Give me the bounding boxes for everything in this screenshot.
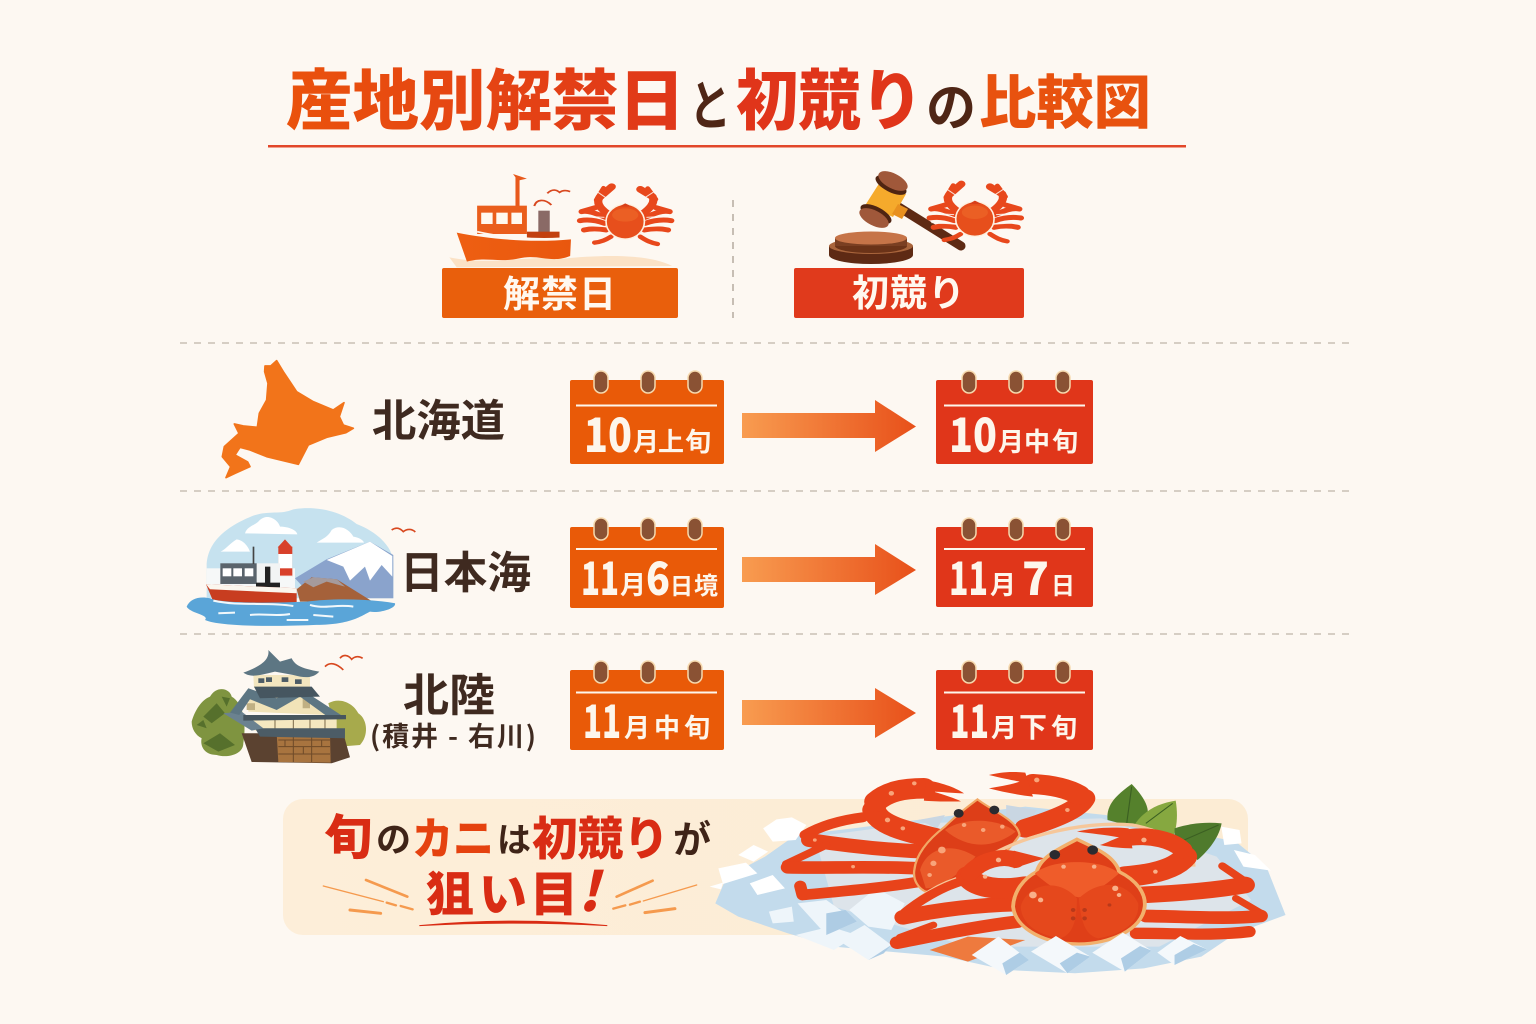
callout text line 1: は [497, 813, 531, 862]
callout text line 1: カニ [412, 803, 494, 867]
icon: crab [580, 187, 671, 244]
calendar: 11月7日: 11 [949, 543, 988, 608]
calendar: 10月上旬 [570, 371, 724, 466]
row: 日本海 [187, 508, 1093, 626]
calendar: 11月中旬: 月 [624, 708, 650, 745]
callout text line 1: 旬 [324, 798, 372, 868]
calendar: 11月7日: 7 [1022, 543, 1049, 608]
calendar: 10月中旬: 月 [998, 422, 1024, 459]
calendar: 11月6日頃: 日 [670, 567, 693, 601]
callout text line 1: 初競り [532, 803, 669, 869]
calendar: 11月下旬: 11 [950, 686, 989, 751]
label: 北海道: 北海道 [372, 385, 505, 449]
back crab [786, 772, 1085, 895]
calendar: 11月6日頃: 6 [646, 543, 670, 608]
icon: sea, boat, lighthouse, mountain [187, 508, 415, 626]
calendar: 11月下旬: 月 [991, 708, 1017, 745]
calendar: 11月下旬: 旬 [1051, 708, 1077, 745]
calendar: 10月中旬: 中 [1024, 422, 1050, 459]
label: 初競り [794, 263, 1024, 318]
calendar: 10月上旬: 月 [633, 422, 659, 459]
calendar: 10月中旬: 10 [949, 400, 997, 466]
callout text line 2: い [479, 855, 527, 925]
title: と [689, 62, 731, 141]
calendar: 11月7日: 月 [990, 565, 1016, 602]
calendar: 10月上旬: 上 [658, 422, 684, 459]
icon: fishing boat [449, 174, 672, 267]
arrow [742, 688, 916, 738]
callout text line 2: ! [578, 848, 604, 927]
callout text line 2 [426, 848, 604, 927]
title: の [926, 66, 976, 141]
label: 解禁日: 解禁日 [503, 264, 617, 318]
icon: crab [930, 184, 1021, 241]
arrow [742, 400, 916, 452]
label: 初競り: 初競り [852, 263, 966, 317]
callout text line 2: 狙 [426, 855, 474, 925]
calendar: 10月上旬: 旬 [685, 422, 711, 459]
row dividers [180, 343, 1350, 634]
label: 日本海: 日本海 [400, 537, 531, 601]
title [286, 48, 1151, 144]
title: 初競り [736, 48, 923, 144]
leaves [1107, 784, 1222, 860]
row: 北陸 [192, 650, 1093, 763]
icon: Hokkaido map [222, 361, 353, 478]
calendar: 11月6日頃 [570, 518, 724, 608]
label: 積井・右川: (積井 - 右川) [370, 715, 536, 754]
calendar: 10月中旬 [936, 371, 1093, 466]
calendar: 11月7日 [936, 518, 1093, 608]
calendar: 11月中旬: 旬 [684, 708, 710, 745]
column header: 初競り [794, 167, 1024, 318]
row: 北海道 [222, 361, 1093, 478]
calendar: 11月7日: 日 [1051, 566, 1075, 601]
title: 産地別解禁日 [286, 48, 685, 144]
icon: gavel [829, 167, 961, 264]
title underline [268, 145, 1186, 148]
title: 比較図 [979, 56, 1151, 140]
illustration: crabs on ice [710, 772, 1286, 975]
callout text line 1: の [376, 812, 411, 863]
calendar: 11月中旬: 11 [583, 686, 621, 751]
callout text line 1: が [673, 809, 711, 864]
callout text line 1 [324, 798, 711, 869]
foreground ice [972, 933, 1207, 975]
calendar: 10月中旬: 旬 [1052, 422, 1078, 459]
banner panel [283, 799, 1248, 935]
arrow [742, 544, 916, 595]
calendar: 11月6日頃: 月 [620, 565, 646, 602]
calendar: 10月上旬: 10 [584, 400, 632, 466]
label: 北陸: 北陸 [403, 659, 495, 724]
calendar: 11月6日頃: 境 [694, 566, 718, 601]
calendar: 11月下旬 [936, 661, 1093, 751]
calendar: 11月中旬 [570, 661, 724, 751]
callout underline and burst lines [323, 880, 697, 926]
calendar: 11月中旬: 中 [654, 708, 680, 745]
label: 解禁日 [442, 264, 678, 318]
calendar: 11月下旬: 下 [1019, 706, 1047, 746]
crushed ice bed [710, 805, 1286, 973]
callout text line 2: 目 [530, 855, 578, 925]
callout banner [283, 798, 1248, 935]
front crab [897, 824, 1263, 962]
column divider [732, 200, 734, 318]
calendar: 11月6日頃: 11 [581, 543, 619, 608]
icon: castle [192, 650, 366, 763]
column header: 解禁日 [442, 174, 678, 318]
